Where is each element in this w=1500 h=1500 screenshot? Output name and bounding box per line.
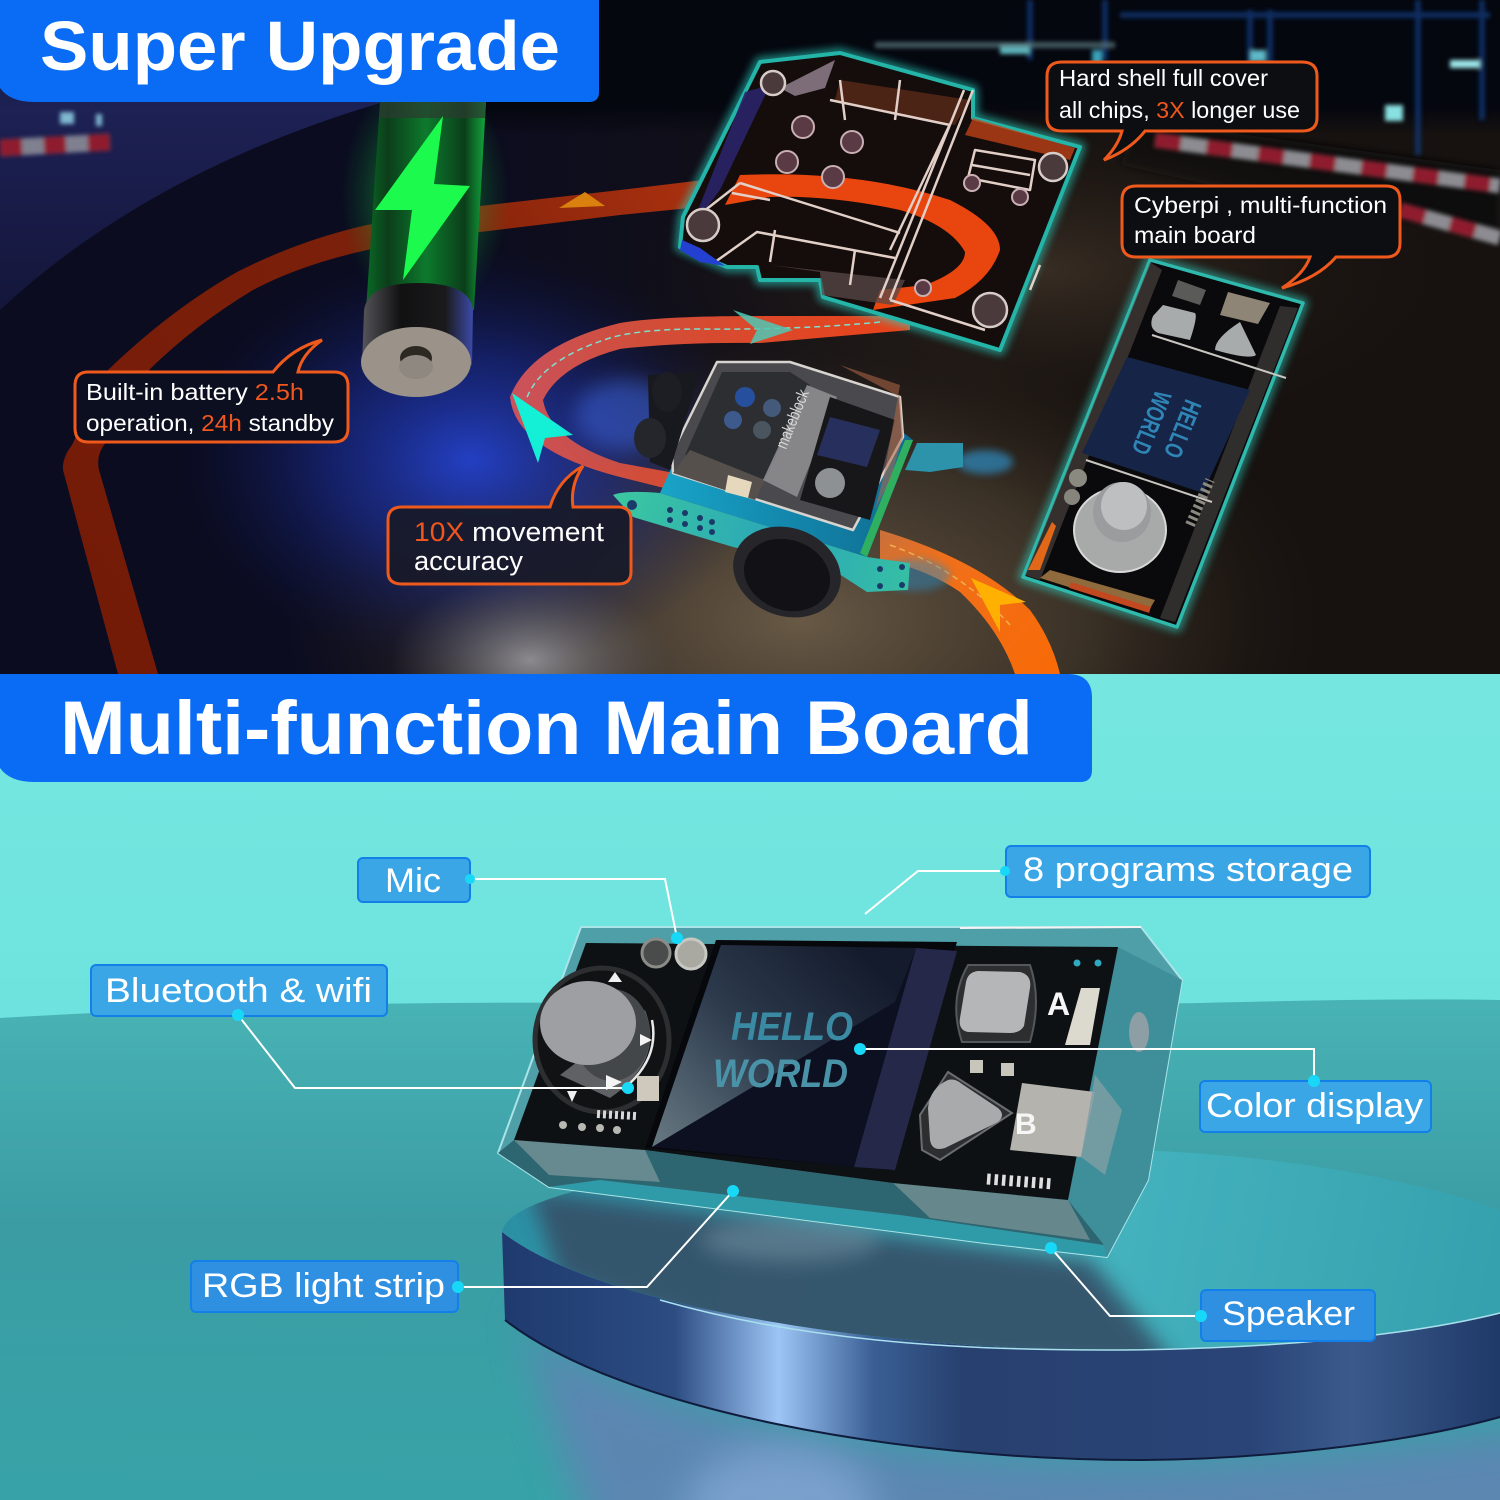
heading: multi-function main board: Multi-function Main Board (60, 686, 1033, 771)
label: speaker (1045, 1242, 1375, 1341)
label: color display: Color display (1206, 1087, 1423, 1125)
icon: mbot robot car (575, 362, 1013, 632)
icon: cyberpi main board (1023, 260, 1303, 627)
callout: movement accuracy: accuracy (414, 546, 523, 576)
label: rgb light strip: RGB light strip (202, 1267, 445, 1305)
label: 8 programs storage: 8 programs storage (1023, 851, 1353, 889)
label: rgb light strip (191, 1185, 739, 1312)
heading: super upgrade: Super Upgrade (40, 7, 560, 85)
label: mic (358, 858, 683, 944)
callout: hard shell (1047, 62, 1317, 160)
screen (1082, 357, 1250, 493)
screen: WORLD (1126, 387, 1176, 458)
panel: multi-function main board background (0, 674, 1500, 1500)
button B: B (1015, 1108, 1037, 1141)
label: bluetooth and wifi: Bluetooth & wifi (105, 972, 372, 1010)
panel: super upgrade scene (0, 0, 1500, 920)
callout: battery (75, 340, 348, 442)
callout: battery: operation, 24h standby (86, 410, 335, 436)
icon: battery (340, 70, 510, 397)
racing track (63, 178, 1060, 674)
icon: track arrow cyan (512, 393, 573, 463)
button A (956, 965, 1100, 1045)
device: cyberpi board (498, 927, 1182, 1257)
icon: transparent hard shell (680, 53, 1080, 350)
callout: movement accuracy: 10X movement (414, 517, 605, 547)
label: speaker: Speaker (1222, 1295, 1355, 1333)
label: 8 programs storage (865, 846, 1370, 914)
icon: mbot robot car: makeblock (772, 387, 813, 451)
mic (642, 939, 706, 969)
platform (502, 1149, 1500, 1460)
callout: battery: Built-in battery 2.5h (86, 379, 304, 405)
screen (645, 940, 957, 1170)
callout: cyberpi: main board (1134, 222, 1256, 248)
heading: multi-function main board (0, 674, 1092, 782)
screen: WORLD (713, 1052, 848, 1096)
callout: hard shell: all chips, 3X longer use (1059, 97, 1300, 123)
button B (920, 1072, 1122, 1175)
label: color display (854, 1043, 1431, 1132)
screen: HELLO (731, 1005, 853, 1049)
icon: lightning bolt (375, 116, 470, 280)
screen: HELLO (1158, 396, 1206, 462)
label: mic: Mic (385, 862, 441, 900)
callout: hard shell: Hard shell full cover (1059, 65, 1268, 91)
icon: track arrow orange (971, 578, 1026, 632)
callout: cyberpi (1122, 186, 1400, 288)
callout: cyberpi: Cyberpi , multi-function (1134, 192, 1387, 218)
button A: A (1047, 986, 1070, 1022)
callout: movement accuracy (388, 466, 631, 584)
heading: super upgrade (0, 0, 599, 102)
label: bluetooth and wifi (91, 965, 634, 1094)
joystick (535, 968, 669, 1112)
